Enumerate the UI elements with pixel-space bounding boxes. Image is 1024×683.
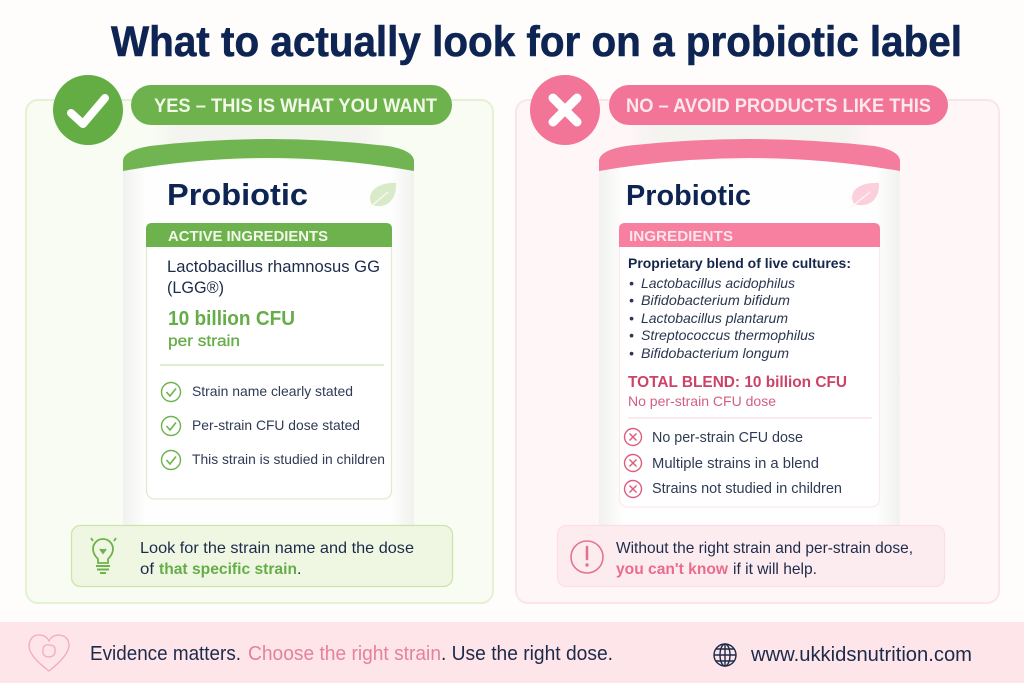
- callout text: Without the right strain and per-strain dose,: [616, 540, 913, 557]
- no pill: [609, 85, 948, 125]
- website: www.ukkidsnutrition.com: [750, 644, 972, 666]
- title: What to actually look for on a probiotic label: [111, 18, 962, 66]
- strain list: [629, 275, 815, 361]
- ingredients box: [146, 223, 392, 499]
- footer message: Choose the right strain: [248, 643, 441, 665]
- x item 2: Multiple strains in a blend: [652, 456, 819, 472]
- strain list: Bifidobacterium bifidum: [641, 292, 790, 308]
- x item 1: No per-strain CFU dose: [652, 430, 803, 446]
- panel background: no: [516, 100, 999, 603]
- callout text: you can't know: [616, 561, 729, 578]
- callout text: [140, 540, 414, 578]
- bottle: yes: [123, 124, 414, 526]
- strain name: Lactobacillus rhamnosus GG: [167, 258, 380, 276]
- strain list: Lactobacillus acidophilus: [641, 275, 795, 291]
- strain name: (LGG®): [167, 279, 224, 297]
- product name: Probiotic: [626, 180, 751, 212]
- ingredients box: ACTIVE INGREDIENTS: [168, 228, 328, 245]
- icon: heart: [29, 635, 69, 671]
- strain list: Bifidobacterium longum: [641, 345, 789, 361]
- ingredients box: INGREDIENTS: [629, 228, 733, 245]
- check item 2: Per-strain CFU dose stated: [192, 417, 360, 433]
- callout text: [616, 540, 913, 578]
- strain list: •: [629, 292, 634, 308]
- icon: warning: [571, 541, 603, 573]
- ingredients header: [619, 223, 880, 247]
- no per-strain dose: No per-strain CFU dose: [628, 393, 776, 409]
- blend heading: Proprietary blend of live cultures:: [628, 255, 851, 271]
- callout: yes: [72, 526, 452, 586]
- check item 1: Strain name clearly stated: [192, 383, 353, 399]
- check item 3: This strain is studied in children: [192, 451, 385, 467]
- callout: no: [558, 526, 944, 586]
- bottle band: green: [123, 139, 414, 171]
- strain list: •: [629, 310, 634, 326]
- strain list: •: [629, 327, 634, 343]
- strain list: Streptococcus thermophilus: [641, 327, 815, 343]
- total blend: TOTAL BLEND: 10 billion CFU: [628, 374, 847, 391]
- strain list: Lactobacillus plantarum: [641, 310, 788, 326]
- footer: [0, 622, 1024, 683]
- callout text: .: [297, 561, 301, 578]
- callout text: that specific strain: [159, 561, 297, 578]
- callout text: if it will help.: [733, 561, 817, 578]
- ingredients box: [619, 223, 880, 507]
- yes pill: YES – THIS IS WHAT YOU WANT: [154, 96, 437, 117]
- icon: x circle: [530, 75, 600, 145]
- callout text: Look for the strain name and the dose: [140, 540, 414, 557]
- footer message: Evidence matters.: [90, 643, 241, 665]
- icon: leaf: [850, 183, 879, 208]
- no pill: NO – AVOID PRODUCTS LIKE THIS: [626, 96, 931, 117]
- icon: check circle: [53, 75, 123, 145]
- header: yes: [53, 75, 452, 145]
- dose: 10 billion CFU: [168, 308, 295, 330]
- footer message: [90, 643, 613, 665]
- header: no: [530, 75, 948, 145]
- yes pill: [131, 85, 452, 125]
- bottle band: pink: [599, 139, 900, 171]
- footer message: . Use the right dose.: [441, 643, 613, 665]
- panel: no: [516, 75, 999, 603]
- footer band: [0, 622, 1024, 683]
- x item 3: Strains not studied in children: [652, 481, 842, 497]
- icon: leaf: [368, 183, 396, 209]
- strain list: •: [629, 275, 634, 291]
- product name: Probiotic: [167, 177, 308, 212]
- ingredients header: [146, 223, 392, 247]
- dose: per strain: [168, 333, 240, 350]
- callout text: of: [140, 561, 155, 578]
- bottle: no: [599, 124, 900, 526]
- strain list: •: [629, 345, 634, 361]
- dose: [168, 308, 295, 350]
- icon: globe: [714, 644, 736, 666]
- panel: yes: [26, 75, 493, 603]
- strain name: [167, 258, 380, 297]
- panel background: yes: [26, 100, 493, 603]
- icon: light bulb: [91, 538, 116, 573]
